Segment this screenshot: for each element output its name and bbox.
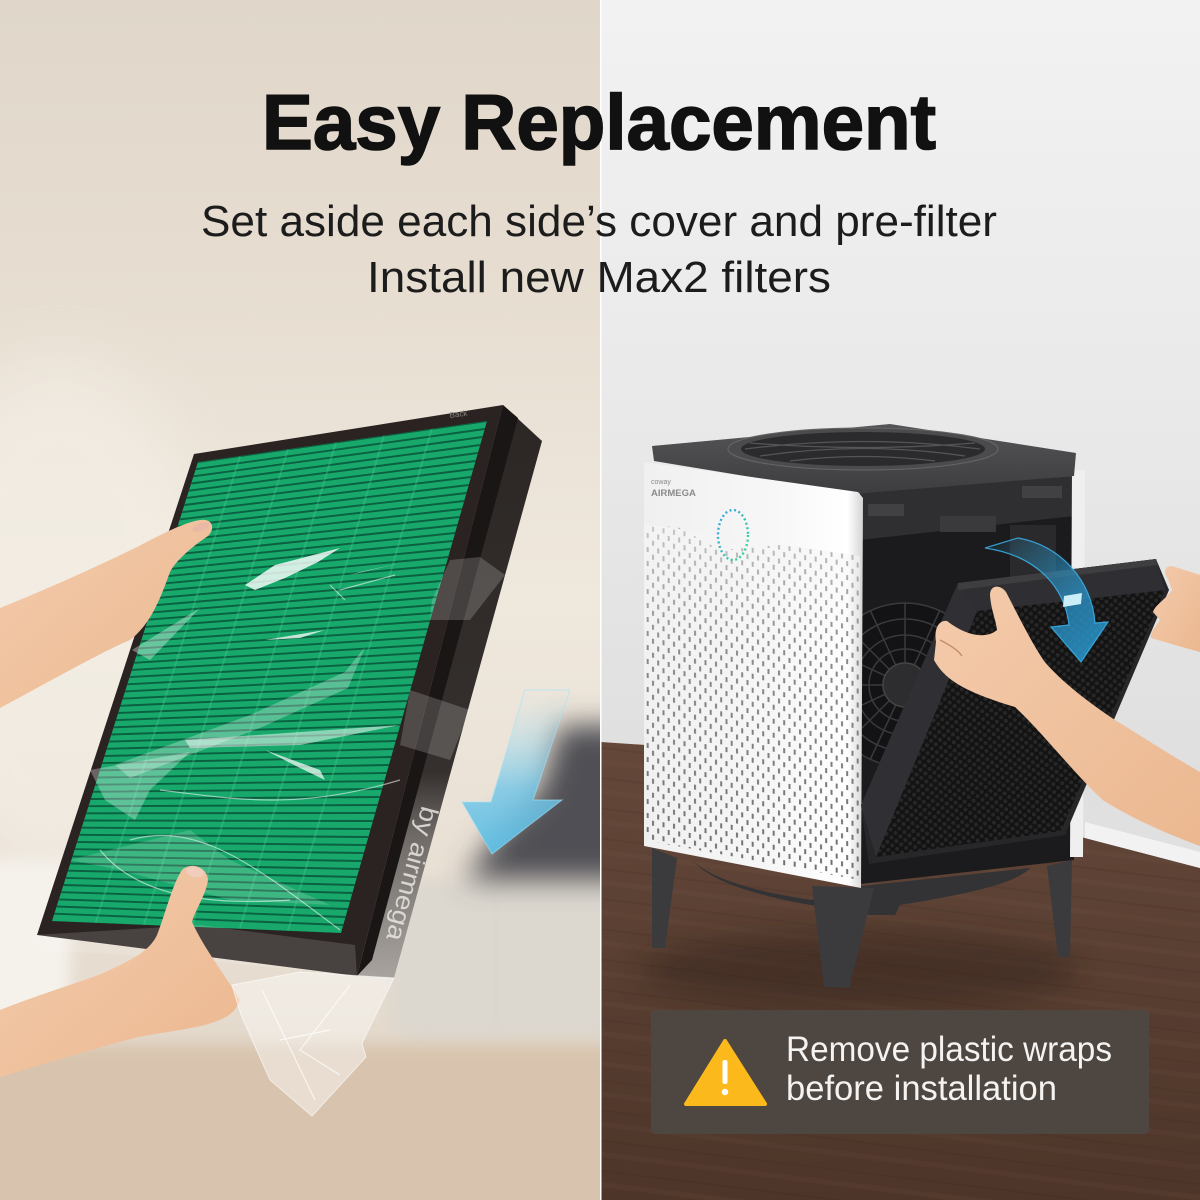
purifier top xyxy=(652,424,1076,494)
title: Easy Replacement xyxy=(262,78,936,166)
divider xyxy=(600,0,602,1200)
icon: curved blue arrow xyxy=(985,538,1108,662)
purifier front panel xyxy=(644,462,863,888)
wooden floor xyxy=(601,742,1200,1200)
perforation grid xyxy=(644,524,860,880)
printed brand text on filter side: by airmega xyxy=(380,803,443,944)
air purifier xyxy=(644,424,1200,988)
back label: Back xyxy=(449,408,469,420)
purifier fan xyxy=(823,603,987,767)
purifier legs xyxy=(652,848,1072,988)
hand holding filter left side xyxy=(934,587,1200,846)
icon: blue down arrow xyxy=(462,690,570,854)
plastic wrap highlights xyxy=(35,548,505,976)
panel: right scene background xyxy=(601,0,1200,1200)
brand logo: coway xyxy=(651,479,671,486)
replacement filter with plastic wrap xyxy=(35,405,542,978)
callout text: before installation xyxy=(786,1069,1057,1108)
callout text: Remove plastic wraps xyxy=(786,1030,1112,1069)
hand holding filter top xyxy=(0,520,212,708)
hand holding filter right side xyxy=(1151,566,1200,652)
subtitle: Set aside each side’s cover and pre-filter xyxy=(201,197,997,246)
replacement filter door xyxy=(861,559,1169,864)
subtitle xyxy=(201,197,997,302)
brand logo: AIRMEGA xyxy=(651,488,696,499)
callout: remove plastic wraps xyxy=(651,1010,1149,1134)
callout text xyxy=(786,1030,1112,1108)
purifier base tray xyxy=(694,862,1030,915)
purifier right strip xyxy=(1070,470,1085,857)
loose plastic bag xyxy=(232,972,394,1116)
hand holding filter bottom xyxy=(0,865,240,1077)
icon: warning triangle xyxy=(686,1041,765,1104)
green filter media xyxy=(40,410,500,940)
filter front frame xyxy=(37,405,503,976)
LED ring xyxy=(718,510,748,560)
purifier open side interior xyxy=(860,476,1074,884)
panel: left scene background xyxy=(0,0,640,1200)
subtitle: Install new Max2 filters xyxy=(367,253,831,302)
brand logo xyxy=(651,479,696,499)
filter foam strip xyxy=(357,405,518,976)
filter side xyxy=(357,405,542,978)
